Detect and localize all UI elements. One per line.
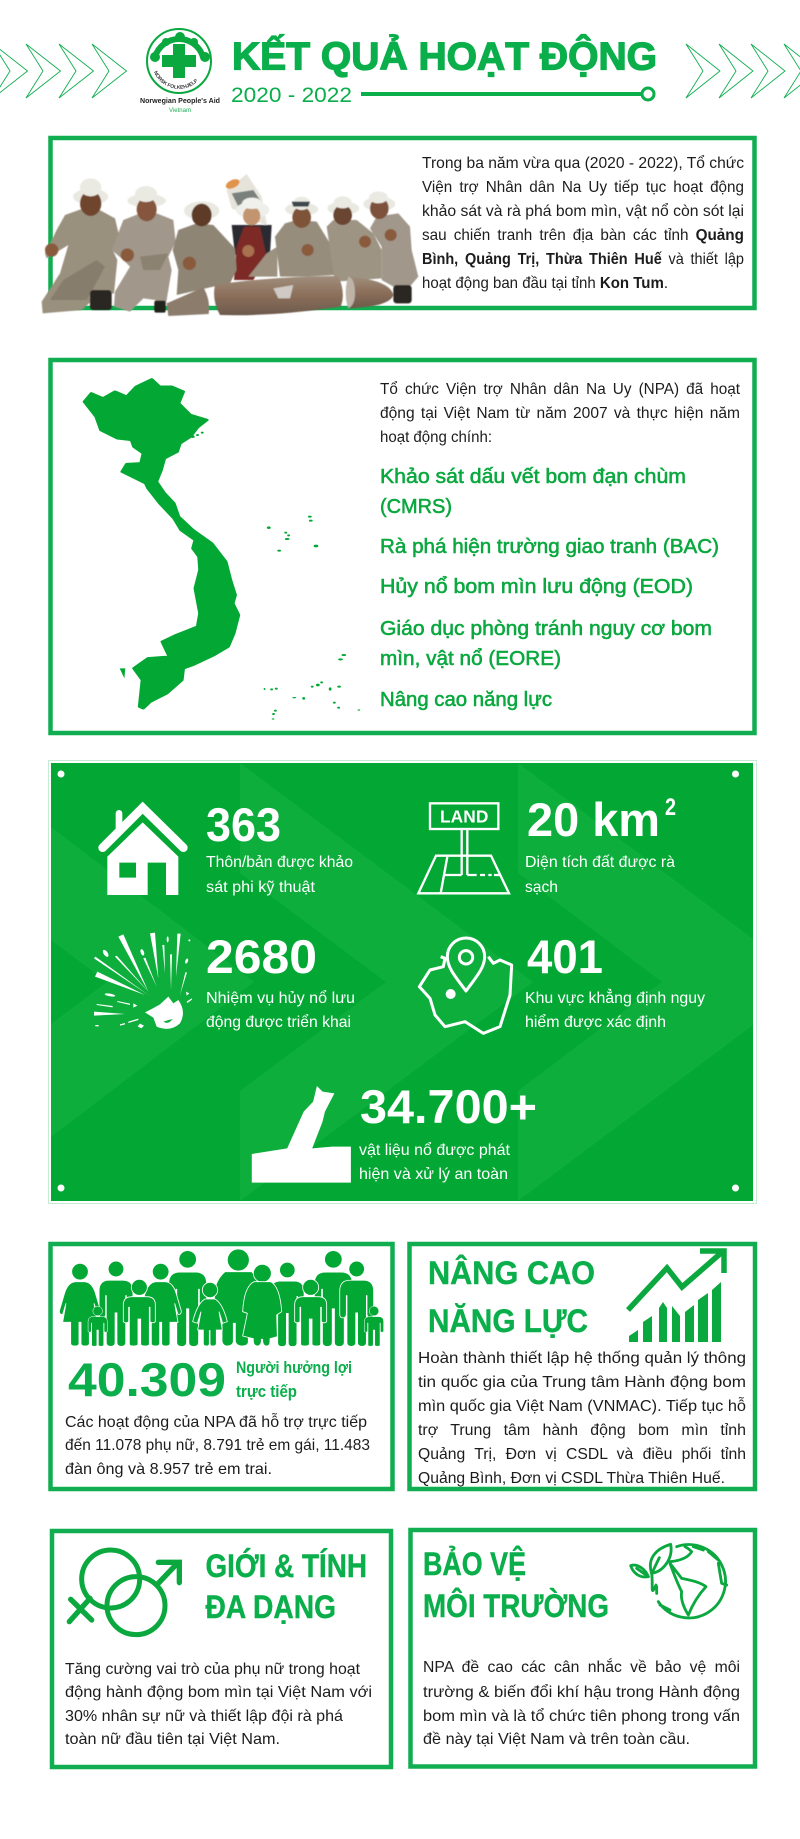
intro text: khảo sát và rà phá bom mìn, vật nổ còn sót lại [422,202,744,220]
heading: MÔI TRƯỜNG [423,1588,609,1624]
intro text: Trong ba năm vừa qua (2020 - 2022), Tổ chức [422,154,744,172]
heading: NĂNG LỰC [428,1303,588,1339]
background chevrons [51,763,753,1201]
environment text: bom mìn và là tổ chức tiên phong trong vấn [423,1707,740,1725]
intro text: hoạt động ban đầu tại tỉnh Kon Tum. [422,275,668,292]
capacity text [418,1350,746,1487]
list of five activities [380,466,719,711]
capacity text: tin quốc gia của Trung tâm Hành động bom [418,1374,746,1391]
logo: Norwegian People's Aid [140,98,220,105]
panel: capacity building [410,1244,755,1489]
subtitle years: 2020 - 2022 [231,84,352,107]
stat: land cleared: 20 km [527,793,660,846]
panel: beneficiaries [50,1244,392,1489]
gender text: Tăng cường vai trò của phụ nữ trong hoạt [65,1661,361,1678]
icon: map with pin [419,938,512,1033]
intro paragraph: động tại Việt Nam từ năm 2007 và thực hiện năm [380,405,740,422]
timeline line [361,88,654,100]
panel: environment [410,1530,755,1766]
stat: EOD tasks: động được triển khai [206,1013,351,1031]
intro text: Viện trợ Nhân dân Na Uy tiếp tục hoạt động [422,179,744,196]
list of five activities: mìn, vật nổ (EORE) [380,648,561,670]
icon: globe with leaves [631,1544,727,1618]
beneficiaries label [236,1358,352,1401]
stat: land cleared: Diện tích đất được rà [525,854,675,871]
beneficiaries label: Người hưởng lợi [236,1358,352,1377]
stat: confirmed hazardous areas: hiểm được xác định [525,1013,666,1031]
icon: land sign [418,803,509,893]
chevrons right [686,44,800,98]
stat: villages surveyed: Thôn/bản được khảo [206,854,353,871]
icon: bomb in ground [252,1086,351,1183]
heading: GIỚI & TÍNH [206,1548,367,1584]
photo: team of deminers with bombs [42,174,418,316]
environment text: đề này tại Việt Nam và trên toàn cầu. [423,1731,690,1748]
panel: gender and diversity [52,1531,391,1767]
intro text [422,154,744,292]
environment text: trường & biến đổi khí hậu trong Hành động [423,1683,740,1701]
heading: NÂNG CAO [428,1255,595,1291]
chevrons left [0,44,126,98]
icon: land sign: LAND [440,806,488,826]
stat: villages surveyed: sát phi kỹ thuật [206,879,316,896]
list of five activities: (CMRS) [380,496,452,518]
intro text: Bình, Quảng Trị, Thừa Thiên Huế và thiết lập [422,251,744,268]
environment text [423,1657,740,1748]
list of five activities: Rà phá hiện trường giao tranh (BAC) [380,536,719,558]
map of Vietnam [84,379,360,720]
icon: group of people [59,1249,384,1347]
gender text [65,1661,372,1748]
stat: land cleared: sạch [525,879,558,896]
environment text: NPA đề cao các cân nhắc về bảo vệ môi [423,1657,740,1676]
heading: BẢO VỆ [423,1546,526,1582]
capacity text: mìn quốc gia Việt Nam (VNMAC). Tiếp tục hỗ [418,1396,746,1415]
stat: villages surveyed [103,798,353,896]
stat: land cleared: 2 [665,794,676,821]
beneficiaries text: đàn ông và 8.957 trẻ em trai. [65,1461,272,1478]
stat: EOD tasks: Nhiệm vụ hủy nổ lưu [206,989,355,1007]
list of five activities: Khảo sát dấu vết bom đạn chùm [380,466,686,488]
panel: intro [42,138,755,316]
gender text: 30% nhân sự nữ và thiết lập đội rà phá [65,1708,343,1725]
intro paragraph [380,380,741,446]
stat: EOD tasks [94,930,355,1031]
stat: explosive items: 34.700+ [360,1080,537,1133]
stat: confirmed hazardous areas: 401 [527,930,603,983]
gender text: toàn nữ đầu tiên tại Việt Nam. [65,1731,280,1748]
heading [423,1546,609,1624]
logo: NORSK FOLKEHJELP [154,70,196,89]
beneficiaries label: trực tiếp [236,1382,297,1401]
stat: explosive items [252,1080,537,1183]
icon: gender symbols [69,1550,179,1635]
intro paragraph: Tổ chức Viện trợ Nhân dân Na Uy (NPA) đã hoạt [380,380,741,398]
panel: activities and map [50,360,754,733]
beneficiaries text: đến 11.078 phụ nữ, 8.791 trẻ em gái, 11.483 [65,1437,370,1454]
heading: ĐA DẠNG [206,1589,336,1625]
capacity text: Quảng Bình, Đơn vị CSDL Thừa Thiên Huế. [418,1470,725,1487]
list of five activities: Nâng cao năng lực [380,689,552,711]
icon: house [103,808,183,895]
stat: land cleared [418,793,676,896]
mounting dots [58,770,739,1192]
panel: key statistics [48,760,756,1204]
stat: confirmed hazardous areas [419,930,705,1033]
beneficiaries text [65,1412,370,1478]
logo: Vietnam [169,108,191,114]
gender text: động hành động bom mìn tại Việt Nam với [65,1684,372,1701]
stat: explosive items: vật liệu nổ được phát [359,1141,511,1159]
heading [428,1255,595,1339]
list of five activities: Giáo dục phòng tránh nguy cơ bom [380,618,712,640]
logo [140,28,220,114]
intro text: sau chiến tranh trên địa bàn các tỉnh Quảng [422,227,744,244]
header [0,28,800,114]
heading [206,1548,367,1625]
intro paragraph: hoạt động chính: [380,429,492,446]
beneficiaries text: Các hoạt động của NPA đã hỗ trợ trực tiếp [65,1412,367,1431]
list of five activities: Hủy nổ bom mìn lưu động (EOD) [380,576,693,598]
capacity text: Quảng Trị, Đơn vị CSDL và điều phối tỉnh [418,1446,746,1463]
stat: explosive items: hiện và xử lý an toàn [359,1166,508,1183]
capacity text: Hoàn thành thiết lập hệ thống quản lý thông [418,1350,746,1367]
icon: rising chart [628,1251,724,1342]
title: KẾT QUẢ HOẠT ĐỘNG [232,34,657,78]
capacity text: trợ Trung tâm hành động bom mìn tỉnh [418,1422,746,1439]
stat: EOD tasks: 2680 [206,930,317,983]
icon: explosion [94,933,192,1029]
stat: villages surveyed: 363 [206,798,281,851]
stat: confirmed hazardous areas: Khu vực khẳng định nguy [525,988,705,1007]
big number: 40.309 [68,1353,226,1406]
